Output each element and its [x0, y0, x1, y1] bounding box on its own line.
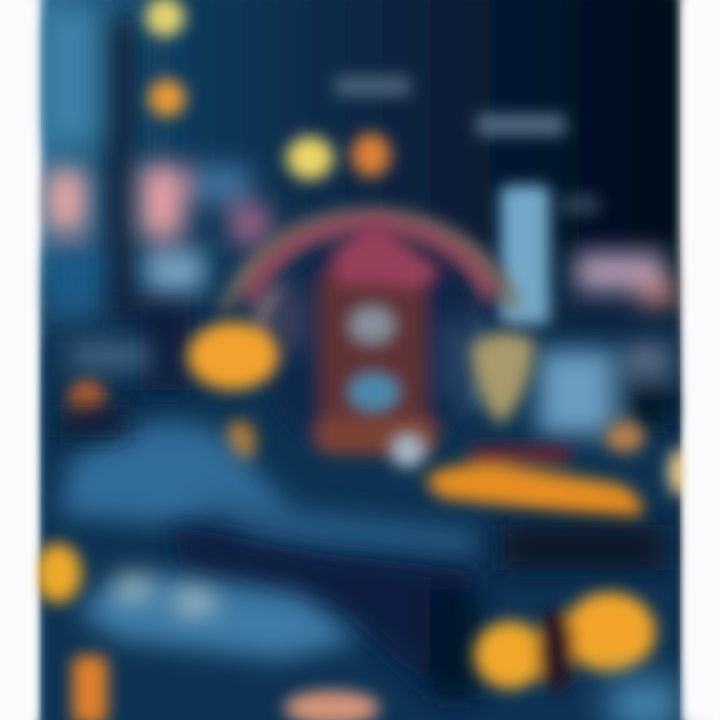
golden coins bottom right	[474, 592, 656, 692]
small orange lights	[68, 381, 692, 496]
faint upper labels	[335, 76, 600, 216]
top lanterns	[145, 0, 391, 180]
gold shield	[470, 332, 535, 425]
bitcoin coin	[260, 218, 484, 458]
lower left blue wave	[60, 422, 480, 560]
orange walkway right	[425, 446, 642, 520]
pink buildings row	[46, 165, 676, 315]
lower city tint	[41, 230, 680, 720]
dark channel	[60, 405, 665, 700]
pink glow bottom centre	[284, 690, 380, 720]
orange post bottom left	[72, 655, 108, 720]
city mid-right buildings	[70, 290, 675, 435]
right pale tower	[500, 185, 550, 325]
lower blue platform	[80, 573, 360, 660]
orange coin left	[187, 322, 279, 390]
bitcoin coin ring	[225, 213, 515, 310]
left tower	[46, 10, 190, 390]
orange coin far left	[34, 543, 82, 603]
bottom right haze	[610, 680, 680, 720]
right margin	[684, 0, 720, 720]
left margin	[0, 0, 36, 720]
